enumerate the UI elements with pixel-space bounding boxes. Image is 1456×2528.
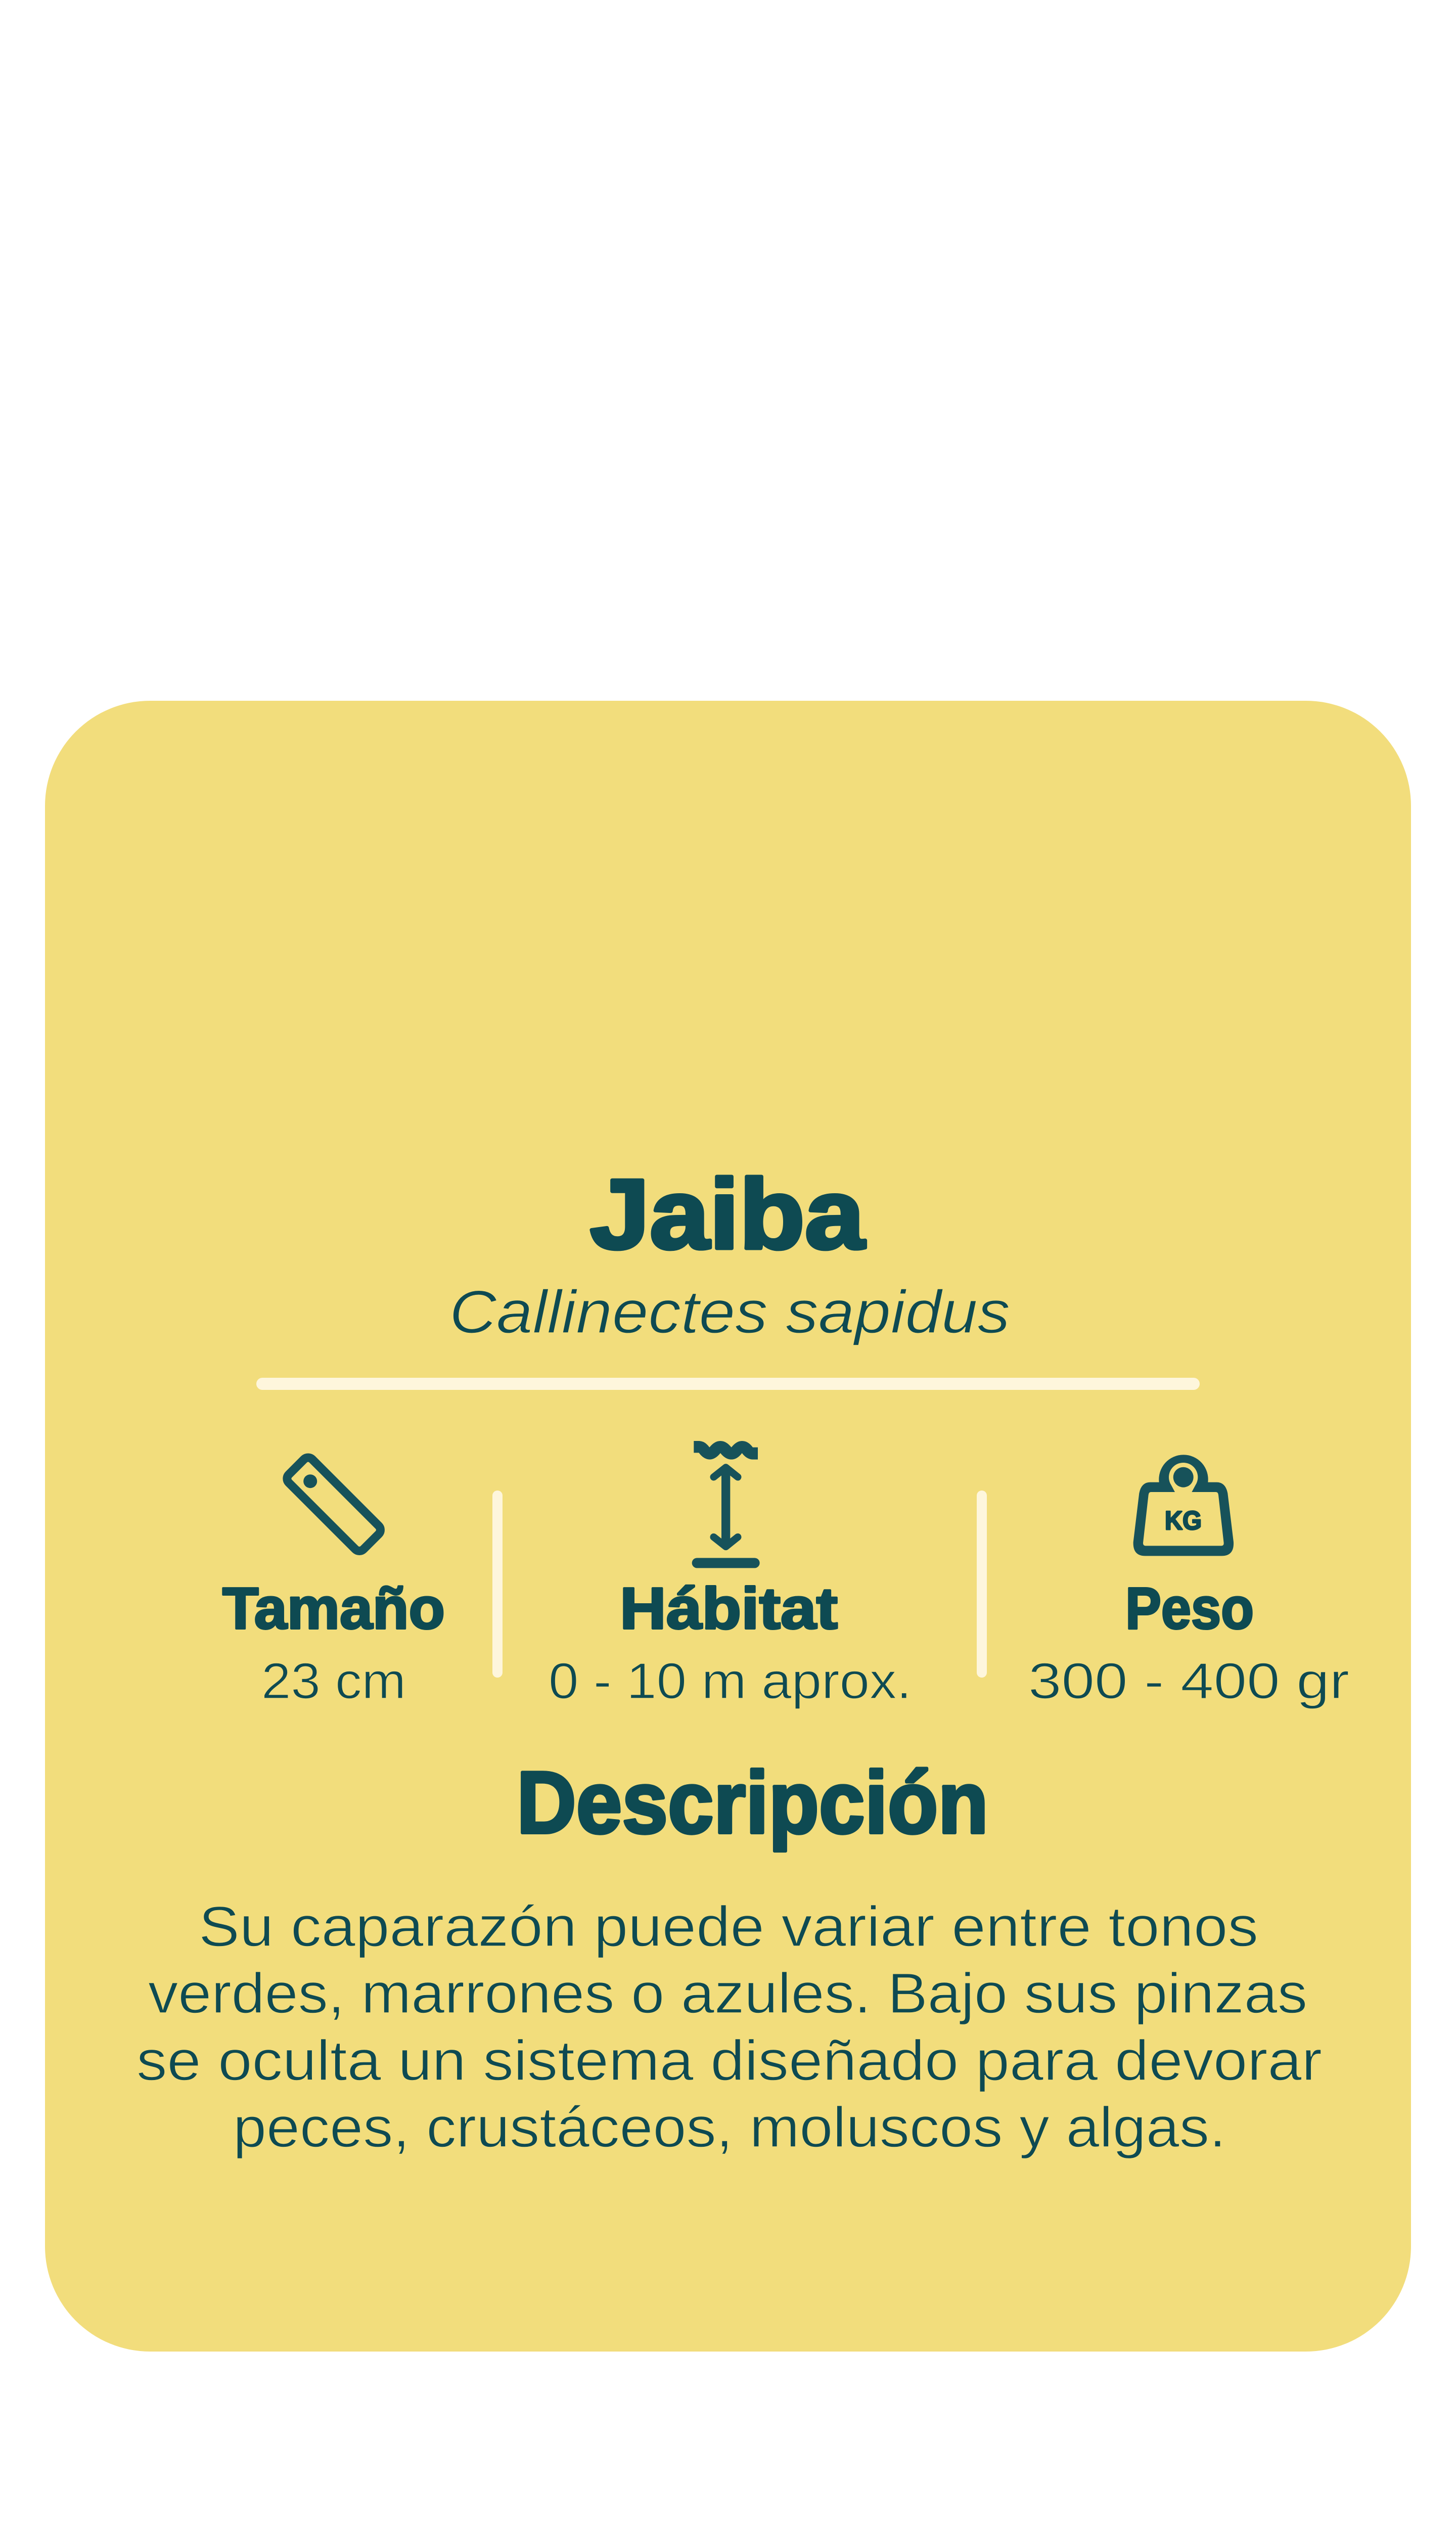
description paragraph: [136, 1895, 1322, 2159]
title: Jaiba: Jaiba: [590, 1159, 866, 1270]
panel: species card: [45, 701, 1411, 2352]
divider left: [492, 1491, 503, 1678]
card background: [45, 701, 1411, 2352]
heading: Descripción: Descripción: [517, 1753, 988, 1852]
stat: weight: [1028, 1455, 1349, 1709]
icon: weight: [1133, 1455, 1234, 1556]
stat: size: [222, 1455, 445, 1709]
value: 300 - 400 gr: 300 - 400 gr: [1028, 1653, 1349, 1709]
subtitle: scientific name: Callinectes sapidus: [449, 1278, 1010, 1346]
label: Hábitat: Hábitat: [620, 1575, 838, 1641]
icon: ruler: [285, 1455, 383, 1553]
description paragraph: peces, crustáceos, moluscos y algas.: [233, 2096, 1226, 2159]
value: 0 - 10 m aprox.: 0 - 10 m aprox.: [549, 1653, 912, 1709]
title divider: [256, 1378, 1200, 1390]
icon: depth: [692, 1441, 760, 1568]
description paragraph: se oculta un sistema diseñado para devorar: [136, 2029, 1322, 2092]
label: Peso: Peso: [1125, 1575, 1254, 1641]
icon: weight: KG: [1165, 1506, 1202, 1536]
divider right: [977, 1491, 987, 1678]
value: 23 cm: 23 cm: [261, 1653, 406, 1709]
label: Tamaño: Tamaño: [222, 1575, 445, 1641]
description paragraph: verdes, marrones o azules. Bajo sus pinzas: [148, 1962, 1307, 2025]
description paragraph: Su caparazón puede variar entre tonos: [199, 1895, 1258, 1958]
stat: habitat: [549, 1441, 912, 1709]
